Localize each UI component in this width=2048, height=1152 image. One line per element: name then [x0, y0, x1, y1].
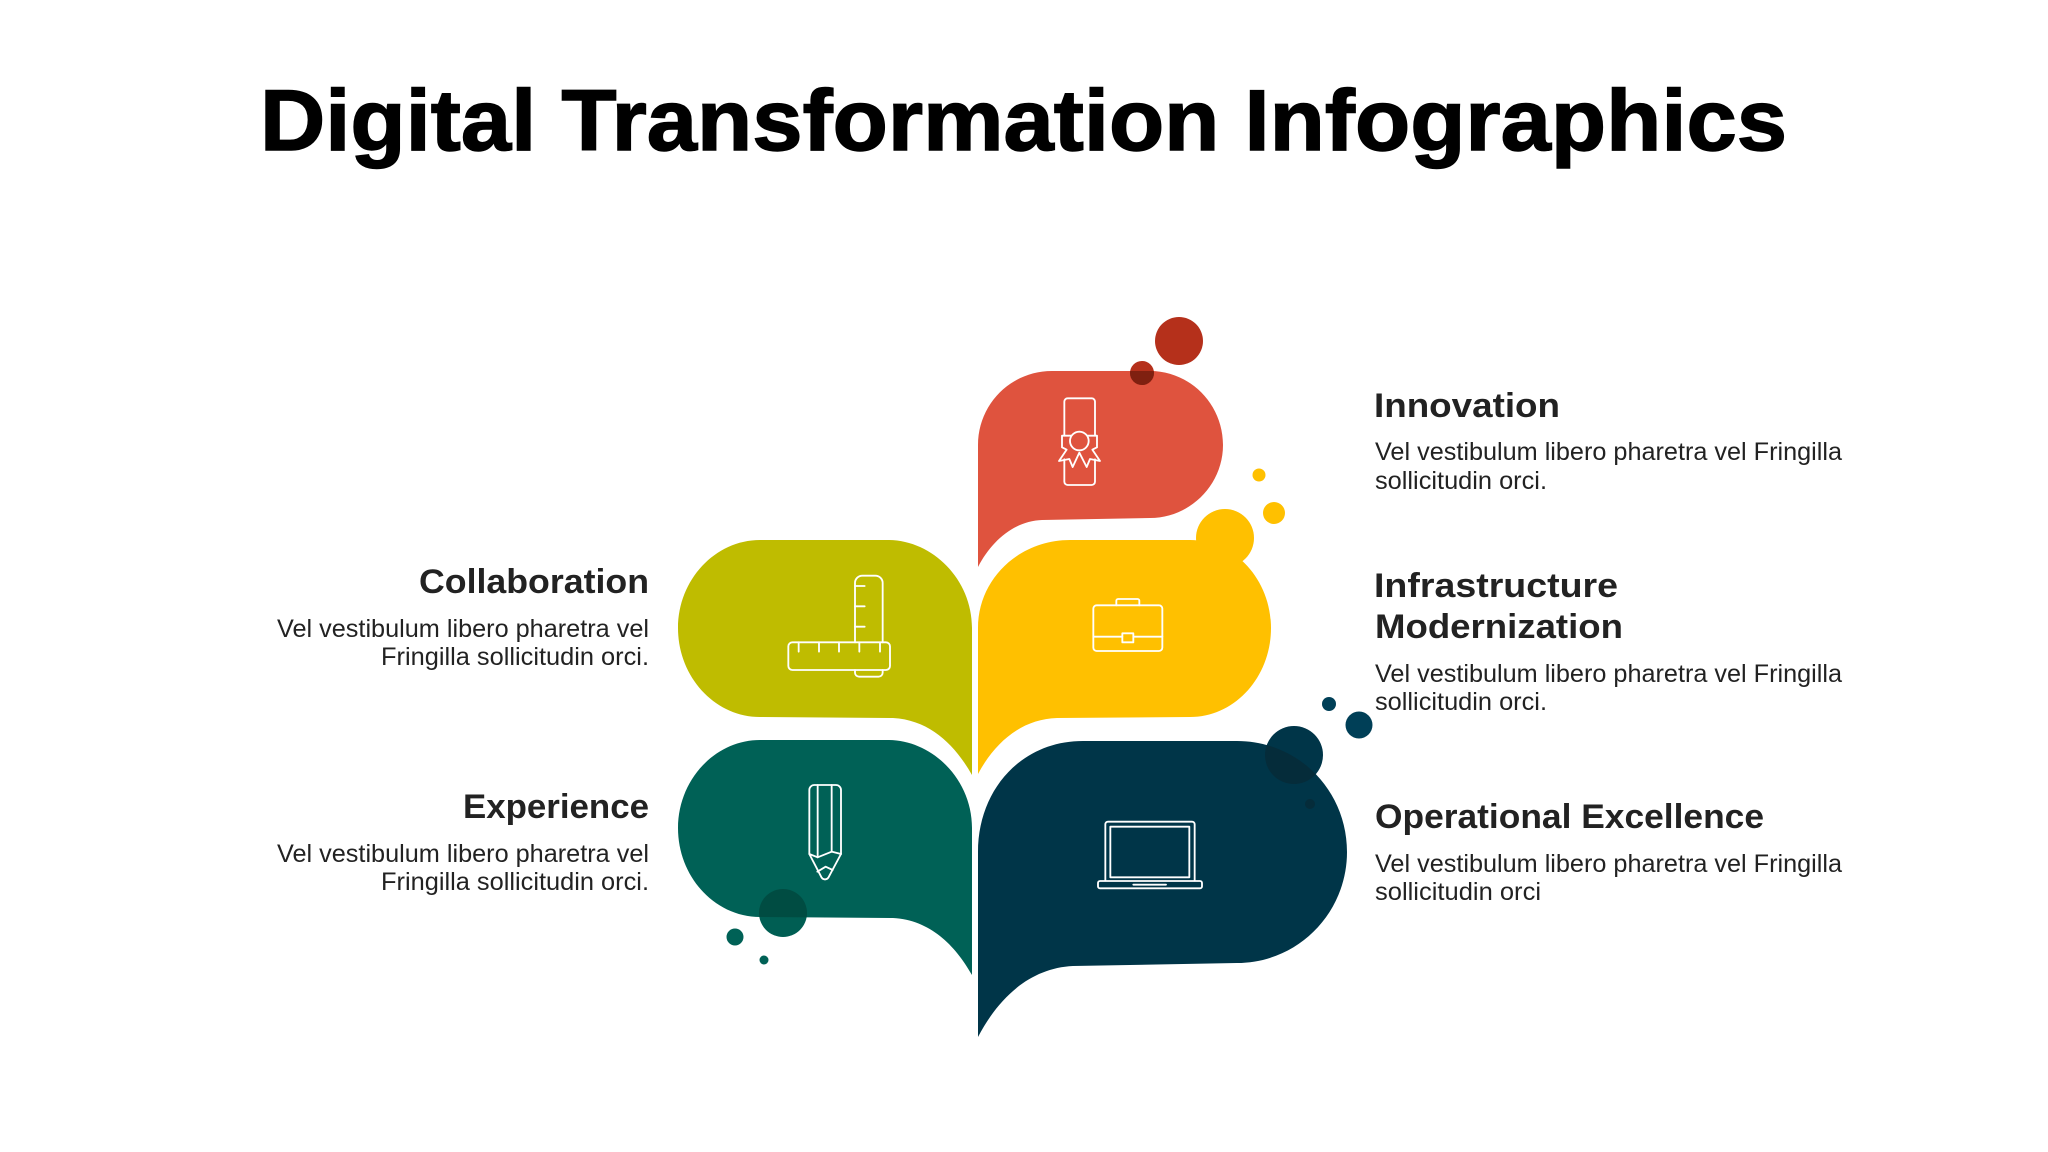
text block: collaboration: Vel vestibulum libero pharetra vel [277, 615, 649, 643]
text block: experience: Vel vestibulum libero pharetra vel [277, 840, 649, 868]
panel: operational excellence speech bubble [978, 697, 1372, 1037]
icon: pencil [809, 785, 841, 879]
text block: operational excellence: Operational Excellence [1375, 798, 1764, 836]
text block: infrastructure modernization: Infrastructure [1374, 567, 1618, 605]
panel: infrastructure modernization speech bubble [978, 468, 1285, 774]
panel: experience speech bubble [678, 740, 972, 975]
text block: experience: Fringilla sollicitudin orci. [381, 868, 649, 896]
panel: innovation speech bubble [978, 317, 1223, 567]
text block: experience [277, 788, 649, 896]
text block: infrastructure modernization: Modernization [1375, 608, 1623, 646]
text block: collaboration [277, 563, 649, 671]
text block: infrastructure modernization [1374, 567, 1842, 716]
text block: collaboration: Fringilla sollicitudin orci. [381, 643, 649, 671]
text block: innovation [1374, 387, 1842, 495]
title: Digital Transformation Infographics [260, 73, 1787, 169]
text block: infrastructure modernization: sollicitudin orci. [1375, 688, 1547, 716]
text block: operational excellence [1375, 798, 1842, 906]
text block: infrastructure modernization: Vel vestibulum libero pharetra vel Fringilla [1375, 660, 1842, 688]
text block: innovation: Innovation [1374, 387, 1560, 425]
text block: collaboration: Collaboration [419, 563, 649, 601]
text block: operational excellence: Vel vestibulum libero pharetra vel Fringilla [1375, 850, 1842, 878]
text block: operational excellence: sollicitudin orci [1375, 878, 1541, 906]
icon: ruler and square [788, 576, 890, 677]
text block: innovation: sollicitudin orci. [1375, 467, 1547, 495]
icon: briefcase [1093, 599, 1162, 651]
icon: laptop [1098, 822, 1202, 888]
text block: innovation: Vel vestibulum libero pharetra vel Fringilla [1375, 438, 1842, 466]
text block: experience: Experience [463, 788, 649, 826]
panel: collaboration speech bubble [678, 540, 972, 775]
icon: certificate with ribbon [1059, 398, 1100, 485]
